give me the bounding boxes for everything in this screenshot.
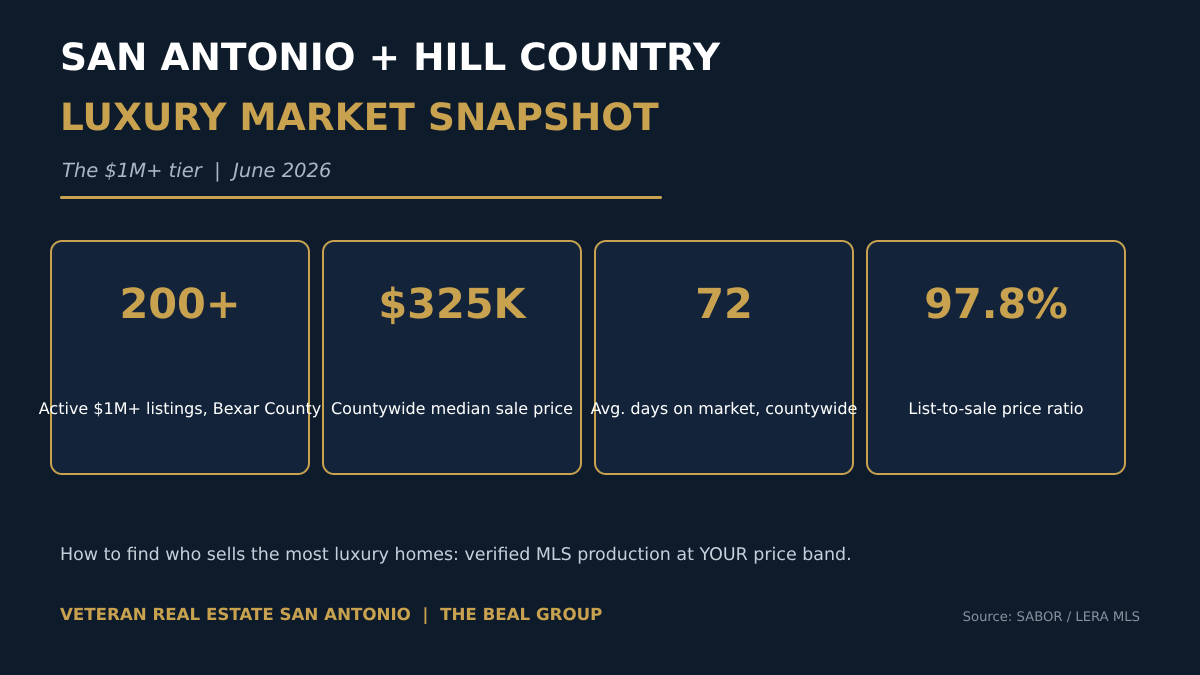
panel: list-to-sale ratio	[866, 240, 1126, 475]
label: active listings: Active $1M+ listings, Bexar County	[39, 399, 321, 418]
stat: 200+: 200+	[119, 280, 241, 328]
label: list-to-sale ratio: List-to-sale price ratio	[908, 399, 1084, 418]
title line 1: SAN ANTONIO + HILL COUNTRY	[60, 35, 720, 79]
stat: $325K: $325K	[378, 280, 526, 328]
panel: median sale price	[322, 240, 582, 475]
accent rule	[60, 196, 662, 199]
stat: 97.8%: 97.8%	[924, 280, 1068, 328]
panel: active listings	[50, 240, 310, 475]
label: days on market: Avg. days on market, countywide	[591, 399, 857, 418]
label: median sale price: Countywide median sale price	[331, 399, 573, 418]
tagline text: How to find who sells the most luxury homes: verified MLS production at YOUR price band.	[60, 545, 852, 565]
stat: 72: 72	[695, 280, 753, 328]
brand footer: VETERAN REAL ESTATE SAN ANTONIO | THE BEAL GROUP	[60, 605, 602, 624]
title line 2: LUXURY MARKET SNAPSHOT	[60, 95, 659, 139]
subtitle: The $1M+ tier | June 2026	[62, 159, 331, 182]
source note: Source: SABOR / LERA MLS	[963, 610, 1140, 625]
panel: days on market	[594, 240, 854, 475]
